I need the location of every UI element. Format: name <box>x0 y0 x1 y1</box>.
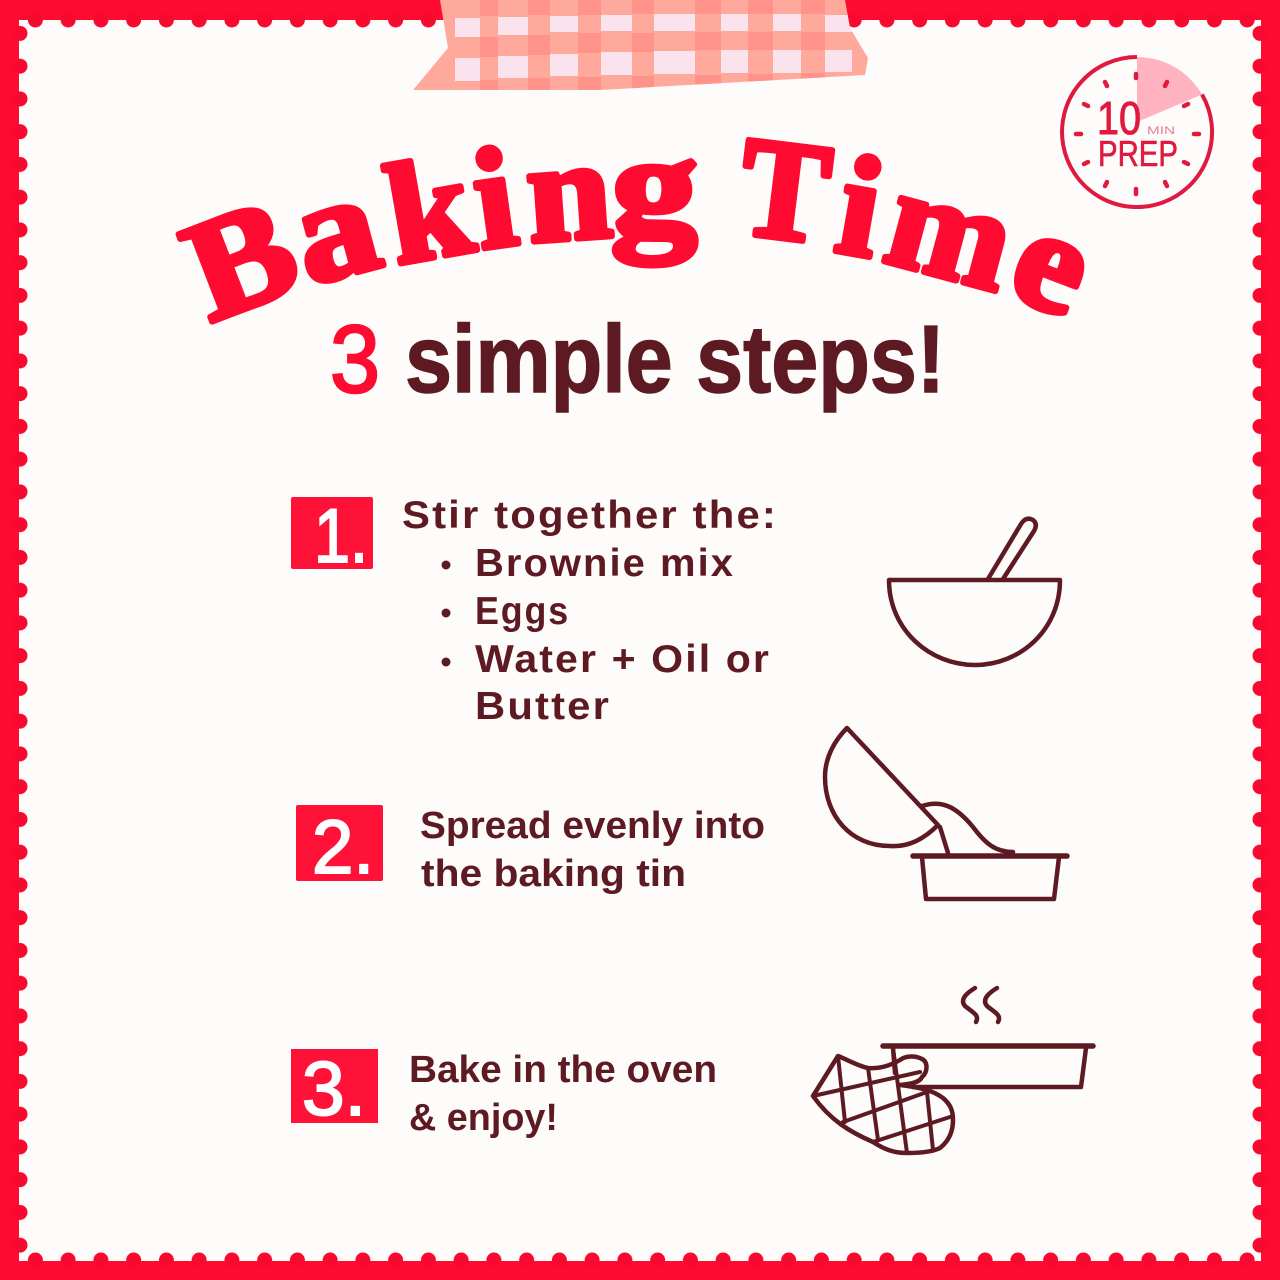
icon: pouring batter into tin <box>825 728 1067 899</box>
gingham tape <box>413 0 868 90</box>
step 3 text <box>409 1049 717 1139</box>
subtitle: simple steps! <box>405 306 945 413</box>
icon: 10 min prep timer <box>1062 57 1212 207</box>
step 2 text: the baking tin <box>421 853 686 895</box>
step 3 number: 3. <box>302 1047 366 1132</box>
step 1 text <box>402 494 778 728</box>
title: i <box>827 125 894 288</box>
title: e <box>993 175 1113 348</box>
step 2 number: 2. <box>312 805 374 890</box>
icon: 10 min prep timer: MIN <box>1147 125 1175 137</box>
step 1 text: Brownie mix <box>475 542 735 585</box>
step 1 text: Butter <box>475 685 611 728</box>
subtitle: 3 <box>330 306 380 413</box>
title: T <box>731 106 839 274</box>
step 1 number: 1. <box>314 494 368 579</box>
icon: oven mitt holding hot tin <box>813 988 1093 1153</box>
step 2 text: Spread evenly into <box>420 805 765 847</box>
icon: 10 min prep timer: 10 <box>1097 92 1141 144</box>
step 1 number <box>291 494 373 579</box>
title <box>164 106 1113 352</box>
step 2 text <box>420 805 765 895</box>
step 3 text: Bake in the oven <box>409 1049 717 1091</box>
title: m <box>872 138 1030 322</box>
step 1 text: Water + Oil or <box>475 638 771 681</box>
title: g <box>611 107 699 266</box>
title: a <box>275 142 394 315</box>
icon: 10 min prep timer: PREP <box>1098 133 1178 174</box>
step 1 text: Eggs <box>475 590 570 633</box>
title: B <box>164 167 317 352</box>
step 3 text: & enjoy! <box>409 1097 558 1139</box>
icon: mixing bowl <box>889 519 1060 665</box>
title: i <box>464 117 525 279</box>
title: k <box>375 126 483 295</box>
title: n <box>521 109 616 273</box>
step 1 text: Stir together the: <box>402 494 778 537</box>
